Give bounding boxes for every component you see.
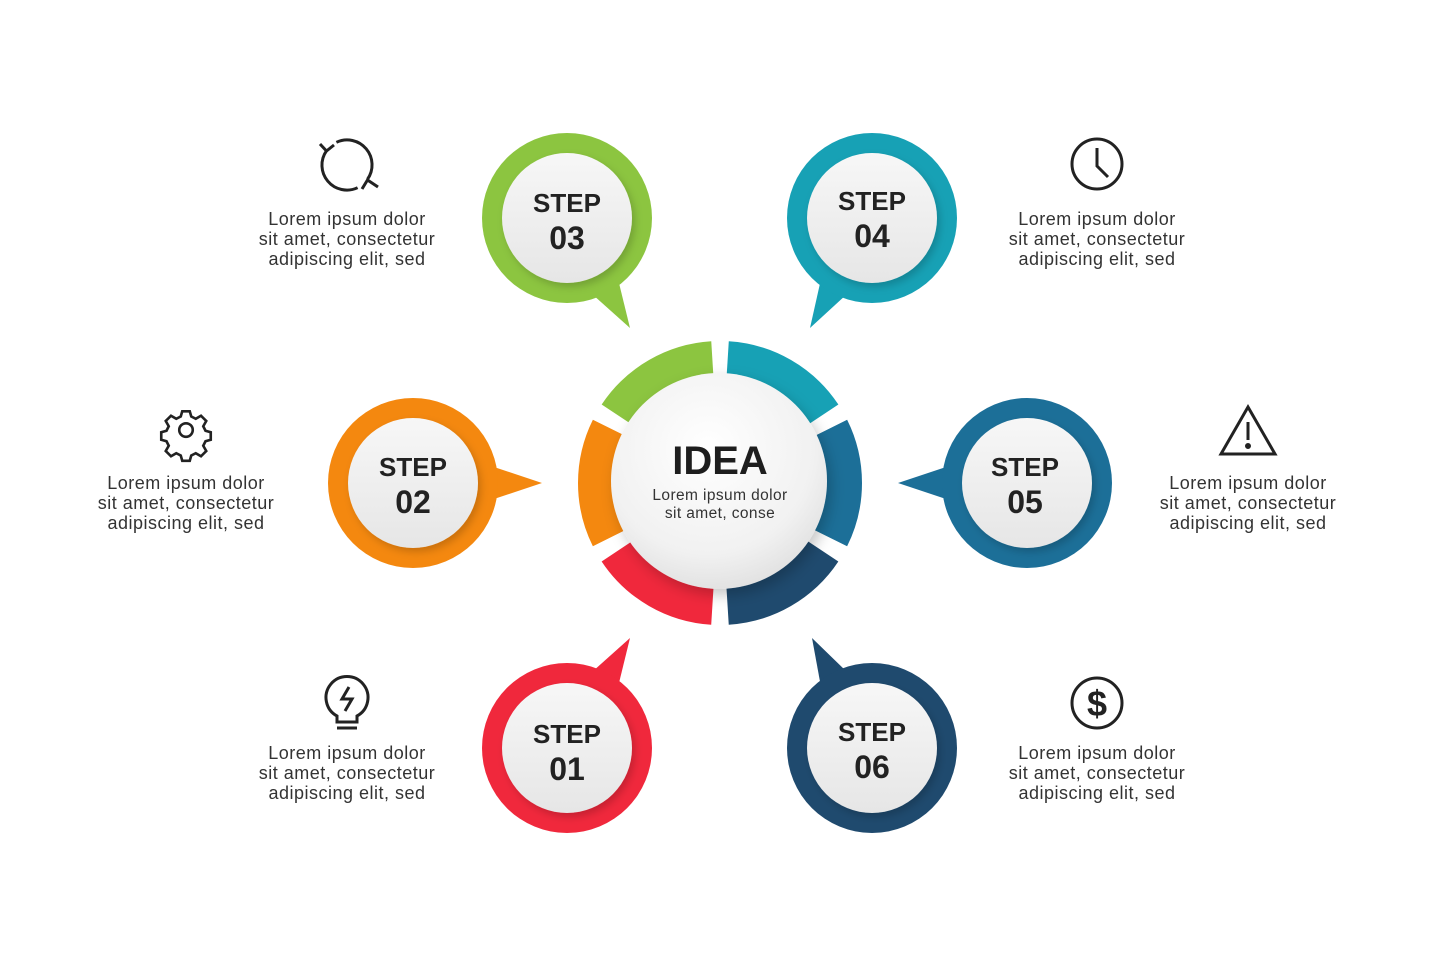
icon: gear [161, 411, 211, 461]
step 06: STEP [838, 717, 906, 747]
text: step 06 [1009, 743, 1185, 803]
step 01: 01 [549, 751, 585, 787]
text: step 03 [259, 209, 435, 269]
icon: warning [1221, 407, 1275, 454]
step 03: STEP [533, 188, 601, 218]
step 06: 06 [854, 749, 890, 785]
text: step 05 [1160, 473, 1336, 533]
text: step 01: adipiscing elit, sed [268, 783, 426, 803]
text: step 03: sit amet, consectetur [259, 229, 435, 249]
text: step 01 [259, 743, 435, 803]
step 04: STEP [838, 186, 906, 216]
text: step 04: adipiscing elit, sed [1018, 249, 1176, 269]
text: step 06: adipiscing elit, sed [1018, 783, 1176, 803]
step 02: 02 [395, 484, 431, 520]
text: step 04 [1009, 209, 1185, 269]
step 05: 05 [1007, 484, 1043, 520]
step 04 [787, 133, 957, 328]
text: step 01: sit amet, consectetur [259, 763, 435, 783]
step 02: STEP [379, 452, 447, 482]
center circle: IDEA [611, 373, 827, 589]
center ring [552, 315, 888, 651]
icon: lightbulb [326, 677, 368, 728]
text: step 01: Lorem ipsum dolor [268, 743, 426, 763]
step 04: 04 [854, 218, 890, 254]
text: step 02 [98, 473, 274, 533]
center circle: IDEA: sit amet, conse [665, 505, 775, 522]
text: step 05: Lorem ipsum dolor [1169, 473, 1327, 493]
text: step 06: Lorem ipsum dolor [1018, 743, 1176, 763]
text: step 04: sit amet, consectetur [1009, 229, 1185, 249]
text: step 03: Lorem ipsum dolor [268, 209, 426, 229]
text: step 03: adipiscing elit, sed [268, 249, 426, 269]
icon: refresh [320, 140, 378, 190]
text: step 02: sit amet, consectetur [98, 493, 274, 513]
icon: dollar: $ [1087, 683, 1107, 724]
icon: dollar [1072, 678, 1122, 728]
text: step 02: Lorem ipsum dolor [107, 473, 265, 493]
step 05: STEP [991, 452, 1059, 482]
text: step 02: adipiscing elit, sed [107, 513, 265, 533]
step 01: STEP [533, 719, 601, 749]
text: step 05: sit amet, consectetur [1160, 493, 1336, 513]
step 03: 03 [549, 220, 585, 256]
text: step 04: Lorem ipsum dolor [1018, 209, 1176, 229]
step 01 [482, 638, 652, 833]
step 02 [328, 398, 542, 568]
icon: clock [1072, 139, 1122, 189]
text: step 05: adipiscing elit, sed [1169, 513, 1327, 533]
text: step 06: sit amet, consectetur [1009, 763, 1185, 783]
center circle: IDEA: Lorem ipsum dolor [652, 487, 788, 504]
center circle: IDEA: IDEA [672, 439, 768, 483]
step 05 [898, 398, 1112, 568]
step 03 [482, 133, 652, 328]
step 06 [787, 638, 957, 833]
